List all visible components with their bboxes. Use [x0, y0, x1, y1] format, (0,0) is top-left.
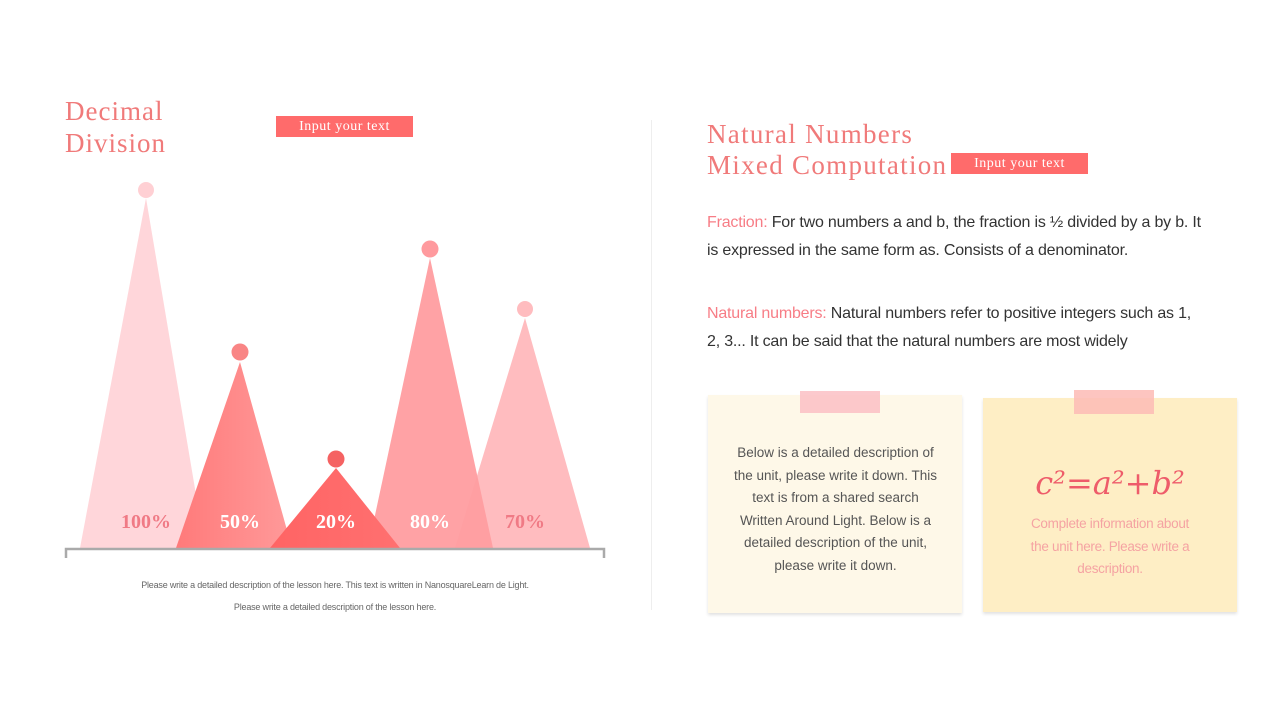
chart: triangle peaks: 80% — [410, 511, 450, 533]
title: natural numbers — [707, 119, 947, 180]
chart: triangle peaks — [64, 182, 606, 558]
chart: triangle peaks: 70% — [505, 511, 545, 533]
chart: triangle peaks: 20% — [316, 511, 356, 533]
title: decimal division — [65, 96, 166, 158]
tag: input your text right: Input your text — [974, 156, 1065, 171]
formula: c²=a²+b² — [1035, 464, 1185, 502]
tag: input your text right — [951, 153, 1088, 174]
note text: Complete information about the unit here. Please write a description. — [1031, 516, 1189, 576]
title: natural numbers: Mixed Computation — [707, 150, 947, 180]
note: left sticky — [708, 395, 962, 613]
note: right sticky — [983, 398, 1237, 612]
title: natural numbers: Natural Numbers — [707, 119, 913, 149]
paragraph: natural numbers: Natural numbers: Natural numbers refer to positive integers such as 1, 2, 3... It can be said that the natural numbers are most widely — [707, 305, 1191, 350]
note text: Below is a detailed description of the unit, please write it down. This text is from a shared search Written Around Light. Below is a detailed description of the unit, please write it down. — [734, 445, 937, 572]
chart: triangle peaks: 50% — [220, 511, 260, 533]
title: decimal division: Decimal — [65, 96, 163, 126]
tape — [800, 391, 880, 413]
paragraph: fraction: Fraction: For two numbers a and b, the fraction is ½ divided by a by b. It is expressed in the same form as. Consists of a denominator. — [707, 214, 1201, 259]
tag: input your text left: Input your text — [299, 119, 390, 134]
tag: input your text left — [276, 116, 413, 137]
caption under chart: Please write a detailed description of the lesson here. This text is written in NanosquareLearn de Light. Please write a detailed description of the lesson here. — [141, 580, 529, 612]
tape — [1074, 390, 1154, 414]
title: decimal division: Division — [65, 128, 166, 158]
chart: triangle peaks: 100% — [121, 511, 171, 533]
